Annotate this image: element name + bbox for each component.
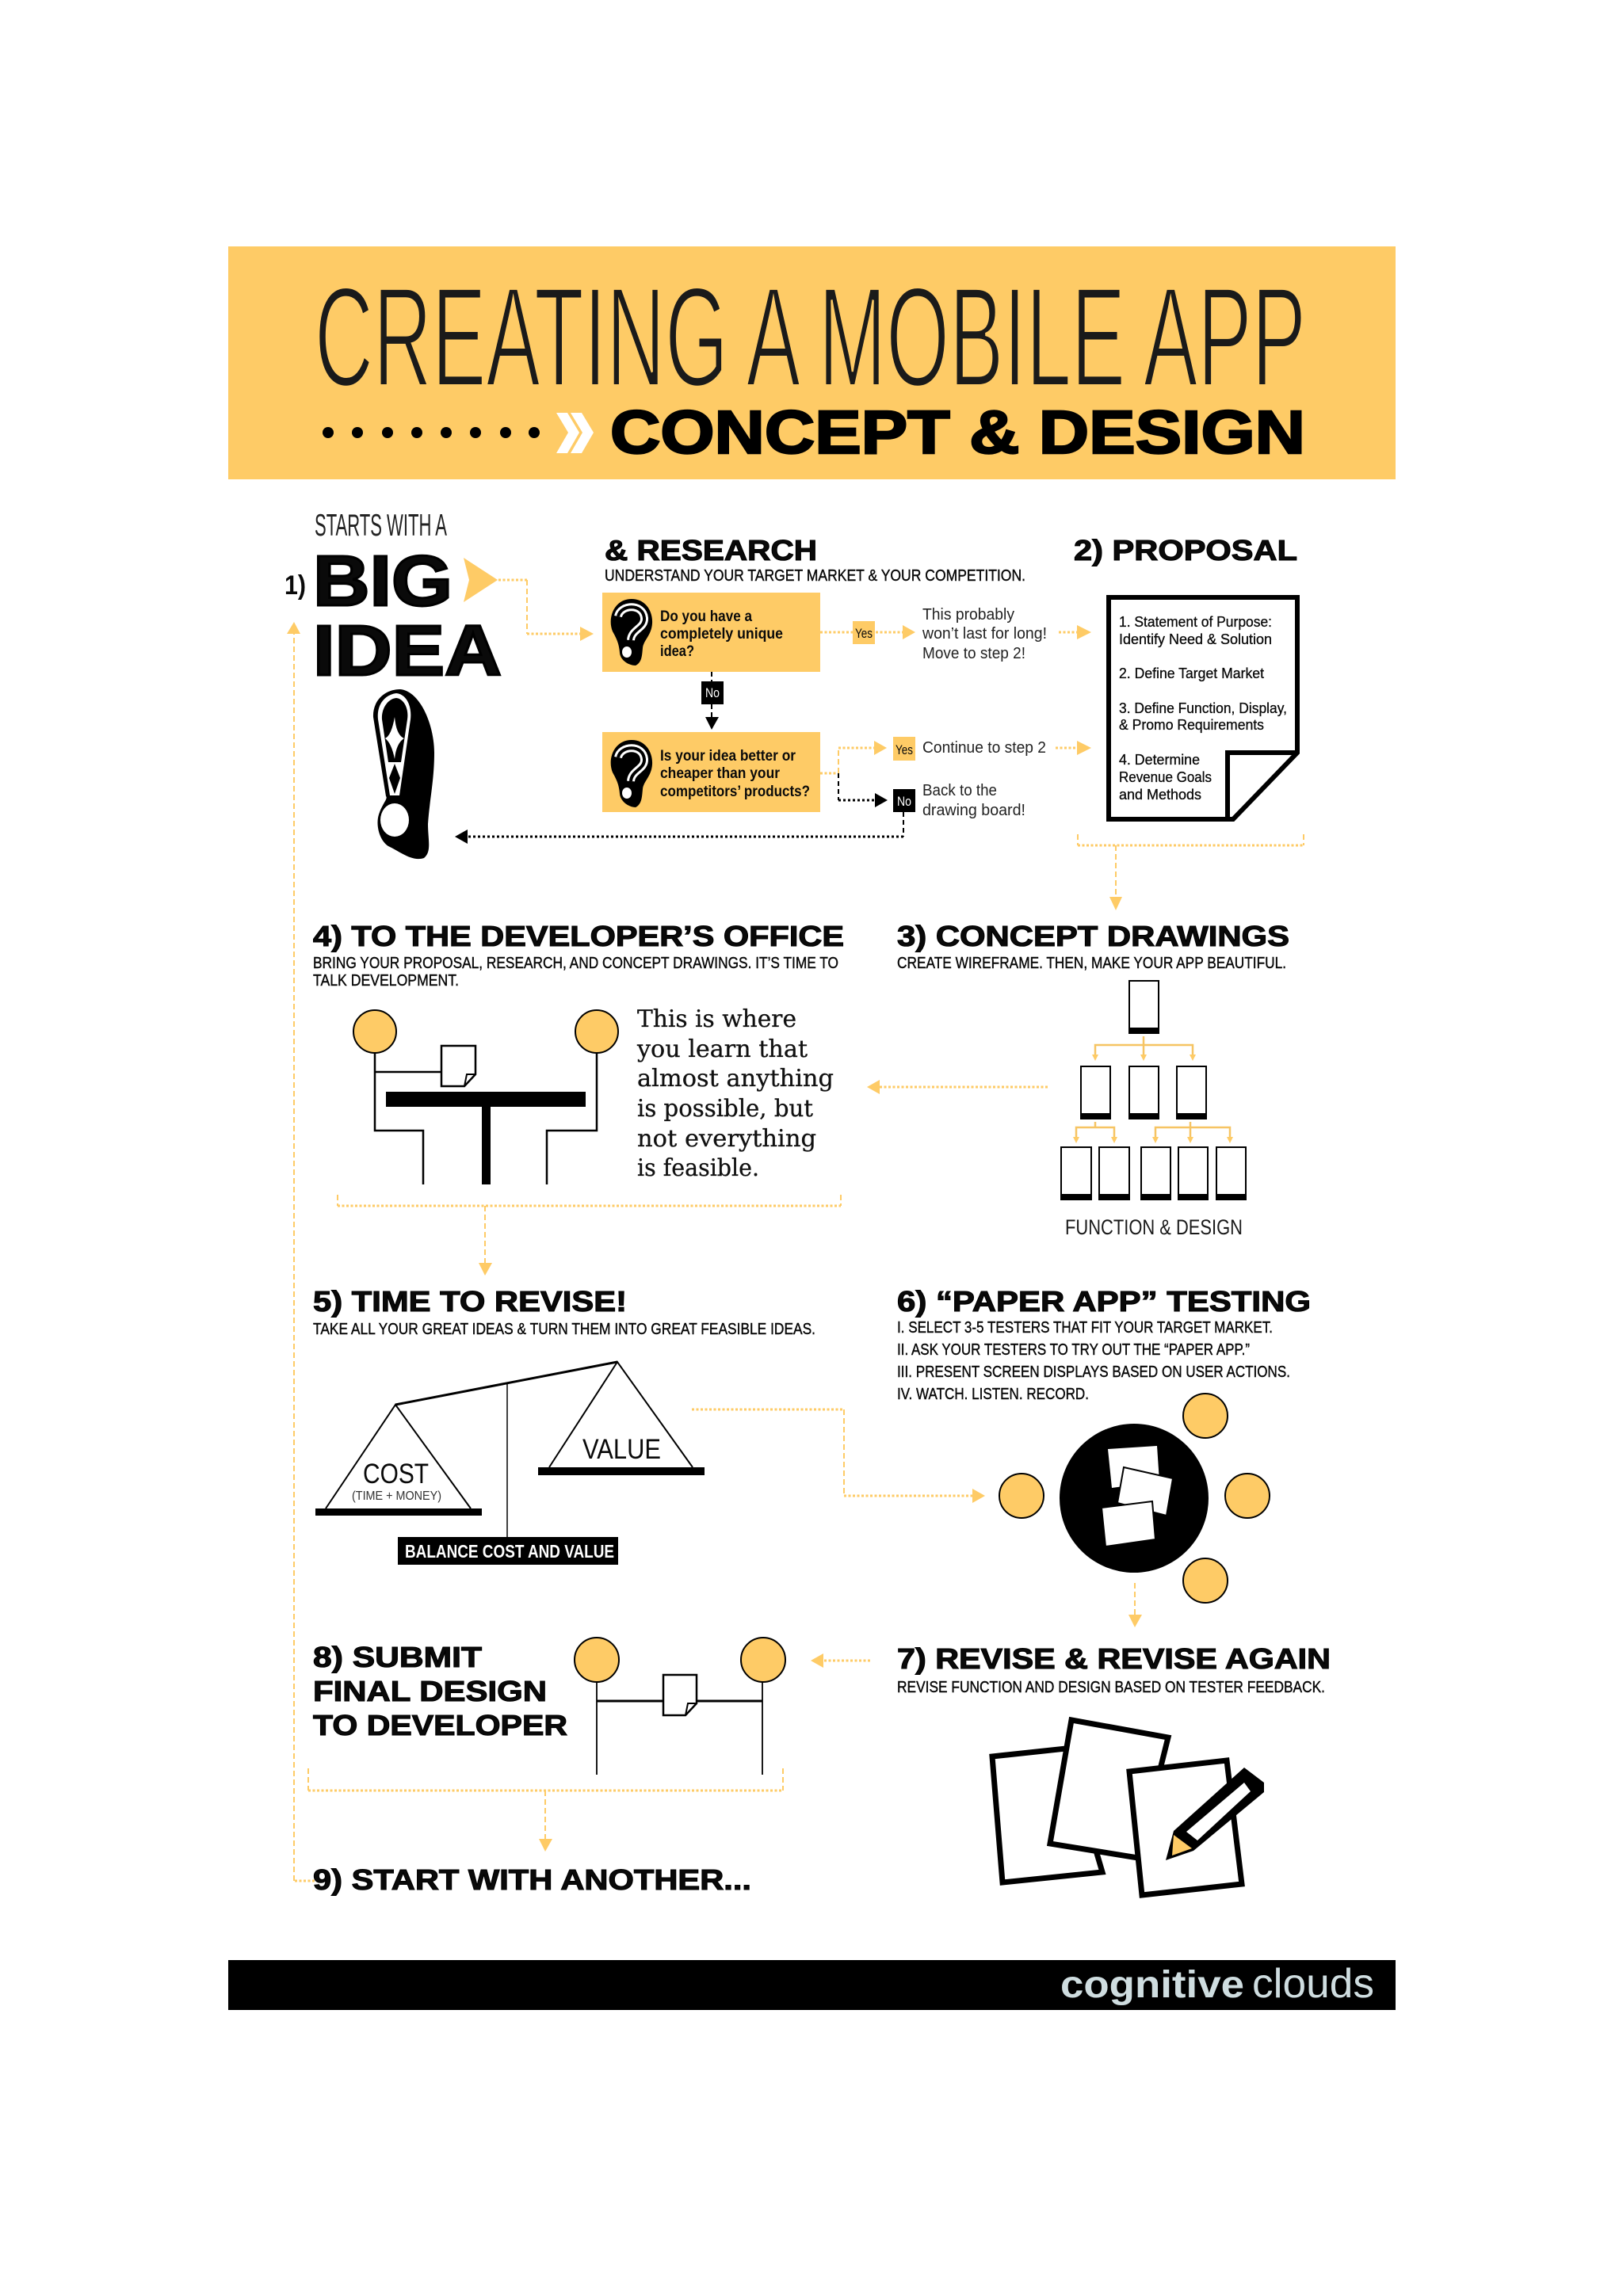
proposal list: 1. Statement of Purpose: bbox=[1119, 613, 1272, 630]
icon: exclamation mark bbox=[373, 689, 434, 859]
testing steps bbox=[897, 1319, 1290, 1403]
developer subtitle: BRING YOUR PROPOSAL, RESEARCH, AND CONCEPT DRAWINGS. IT’S TIME TO bbox=[313, 955, 838, 972]
middle wireframes bbox=[1081, 1066, 1206, 1119]
yes outcome text: Move to step 2! bbox=[922, 645, 1025, 662]
tree arrowheads bbox=[1073, 1055, 1233, 1143]
question text: Do you have a bbox=[660, 608, 752, 625]
developer subtitle bbox=[313, 955, 838, 990]
arrow to proposal 2 bbox=[1056, 741, 1091, 755]
proposal list bbox=[1119, 613, 1287, 803]
step number 1: 1) bbox=[285, 570, 306, 601]
proposal list: & Promo Requirements bbox=[1119, 716, 1264, 733]
icon: white double chevron bbox=[556, 413, 594, 453]
logo: cognitive clouds bbox=[1060, 1961, 1374, 2007]
connector: big idea to research bbox=[498, 580, 594, 641]
heading: revise again: 7) REVISE & REVISE AGAIN bbox=[897, 1642, 1331, 1675]
idea: IDEA bbox=[313, 612, 502, 691]
yes and no split bbox=[820, 741, 888, 807]
loop arrow: back to step 1 bbox=[287, 622, 315, 1881]
arrow to revise again bbox=[1128, 1583, 1142, 1627]
starts with a: STARTS WITH A bbox=[315, 509, 447, 543]
icon: pencil bbox=[1166, 1768, 1264, 1860]
research subtitle: UNDERSTAND YOUR TARGET MARKET & YOUR COMPETITION. bbox=[605, 567, 1025, 585]
big: BIG bbox=[313, 542, 453, 621]
illustration: meeting at a table bbox=[353, 1010, 618, 1184]
value label: VALUE bbox=[582, 1434, 661, 1465]
callout: what is feasible: is feasible. bbox=[637, 1154, 759, 1182]
icon: question mark bbox=[611, 740, 652, 807]
proposal list: 2. Define Target Market bbox=[1119, 665, 1264, 681]
question text bbox=[660, 608, 783, 660]
wireframe home bars bbox=[1060, 1028, 1247, 1200]
no tag 2 bbox=[893, 789, 915, 812]
yes outcome text bbox=[922, 606, 1047, 662]
back to the drawing board text: drawing board! bbox=[922, 802, 1025, 819]
step 8: submit final design bbox=[313, 1638, 785, 1775]
callout: what is feasible: is possible, but bbox=[637, 1095, 813, 1123]
yes tag 2: Yes bbox=[896, 742, 913, 757]
icon: proposal document bbox=[1109, 597, 1297, 819]
question text: idea? bbox=[660, 643, 694, 660]
proposal list: 3. Define Function, Display, bbox=[1119, 700, 1287, 716]
heading: time to revise: 5) TIME TO REVISE! bbox=[313, 1285, 627, 1318]
icon: yellow arrow bbox=[464, 558, 498, 602]
no branch bbox=[701, 672, 724, 730]
footer bar bbox=[228, 1960, 1396, 2010]
heading: developer's office: 4) TO THE DEVELOPER’S OFFICE bbox=[313, 920, 844, 952]
logo: cognitive clouds: clouds bbox=[1252, 1961, 1374, 2007]
tree connectors bbox=[1076, 1036, 1230, 1138]
heading: submit final design: TO DEVELOPER bbox=[313, 1709, 567, 1741]
testing steps: III. PRESENT SCREEN DISPLAYS BASED ON USER ACTIONS. bbox=[897, 1363, 1290, 1381]
heading: paper app testing: 6) “PAPER APP” TESTING bbox=[897, 1285, 1311, 1318]
yes outcome text: This probably bbox=[922, 606, 1014, 624]
research section bbox=[455, 534, 1091, 844]
connector: revise to paper app testing bbox=[692, 1409, 985, 1503]
back to the drawing board text bbox=[922, 782, 1025, 819]
revise again subtitle: REVISE FUNCTION AND DESIGN BASED ON TESTER FEEDBACK. bbox=[897, 1679, 1325, 1696]
illustration: handing over design bbox=[575, 1638, 785, 1775]
illustration: testers around a table bbox=[999, 1394, 1270, 1603]
heading: concept drawings: 3) CONCEPT DRAWINGS bbox=[897, 920, 1289, 952]
logo: cognitive clouds: cognitive bbox=[1060, 1964, 1244, 2006]
wireframe tree bbox=[1060, 981, 1247, 1200]
proposal list: Revenue Goals bbox=[1119, 769, 1212, 785]
step 6: paper app testing bbox=[897, 1285, 1311, 1627]
step 3: concept drawings bbox=[897, 920, 1289, 1239]
heading: submit final design bbox=[313, 1641, 567, 1741]
cost label: COST bbox=[363, 1459, 429, 1489]
step 5: time to revise bbox=[313, 1285, 815, 1565]
subtitle: concept and design: CONCEPT & DESIGN bbox=[610, 399, 1305, 467]
no branch: No bbox=[705, 685, 720, 700]
callout: what is feasible: you learn that bbox=[636, 1035, 808, 1063]
heading: submit final design: FINAL DESIGN bbox=[313, 1675, 547, 1707]
time plus money label: (TIME + MONEY) bbox=[352, 1489, 441, 1503]
heading: proposal: 2) PROPOSAL bbox=[1074, 534, 1297, 566]
question text: Is your idea better or bbox=[660, 748, 796, 765]
heading: research: & RESEARCH bbox=[605, 534, 817, 566]
title banner bbox=[228, 246, 1396, 479]
yes branch 1: Yes bbox=[855, 626, 873, 641]
yes tag 2 bbox=[893, 737, 915, 761]
question box 2 bbox=[602, 732, 820, 812]
proposal list: 4. Determine bbox=[1119, 751, 1200, 768]
step 9: start with another: 9) START WITH ANOTHER... bbox=[313, 1863, 751, 1896]
illustration: papers and pencil bbox=[992, 1720, 1264, 1895]
function and design label: FUNCTION & DESIGN bbox=[1065, 1215, 1243, 1239]
step 1: big idea bbox=[285, 509, 502, 859]
question text: cheaper than your bbox=[660, 765, 781, 782]
callout: what is feasible: not everything bbox=[637, 1125, 816, 1153]
no tag 2: No bbox=[897, 794, 911, 809]
testing steps: I. SELECT 3-5 TESTERS THAT FIT YOUR TARGET MARKET. bbox=[897, 1319, 1273, 1337]
arrow to proposal 1 bbox=[1059, 625, 1091, 639]
back to the drawing board text: Back to the bbox=[922, 782, 997, 799]
step 2: proposal bbox=[1074, 534, 1297, 819]
connector: submit to start another bbox=[308, 1768, 783, 1852]
proposal list: and Methods bbox=[1119, 786, 1201, 803]
concept subtitle: CREATE WIREFRAME. THEN, MAKE YOUR APP BEAUTIFUL. bbox=[897, 955, 1286, 972]
balance label bbox=[398, 1537, 618, 1565]
question text bbox=[660, 748, 810, 800]
heading: submit final design: 8) SUBMIT bbox=[313, 1641, 482, 1673]
testing steps: IV. WATCH. LISTEN. RECORD. bbox=[897, 1386, 1089, 1403]
proposal list: Identify Need & Solution bbox=[1119, 631, 1272, 647]
illustration: balance scale bbox=[315, 1362, 705, 1565]
bottom wireframes bbox=[1061, 1147, 1246, 1199]
question box 1 bbox=[602, 593, 820, 672]
question text: completely unique bbox=[660, 626, 783, 643]
balance label: BALANCE COST AND VALUE bbox=[405, 1541, 614, 1562]
connector: proposal to concept drawings bbox=[1078, 834, 1304, 910]
continue text: Continue to step 2 bbox=[922, 739, 1046, 757]
arrow: concept drawings to developer bbox=[867, 1080, 1048, 1094]
arrow: revise again to submit bbox=[811, 1653, 870, 1668]
top wireframe bbox=[1129, 981, 1159, 1033]
testing steps: II. ASK YOUR TESTERS TO TRY OUT THE “PAPER APP.” bbox=[897, 1341, 1250, 1359]
dotted lead-in bbox=[323, 427, 540, 438]
developer subtitle: TALK DEVELOPMENT. bbox=[313, 972, 459, 990]
callout: what is feasible bbox=[636, 1005, 834, 1182]
yes outcome text: won’t last for long! bbox=[922, 625, 1047, 643]
callout: what is feasible: This is where bbox=[637, 1005, 796, 1033]
step 7: revise and revise again bbox=[897, 1642, 1331, 1895]
question text: competitors’ products? bbox=[660, 784, 810, 800]
callout: what is feasible: almost anything bbox=[637, 1065, 834, 1093]
arrow back to big idea bbox=[455, 812, 903, 844]
revise subtitle: TAKE ALL YOUR GREAT IDEAS & TURN THEM INTO GREAT FEASIBLE IDEAS. bbox=[313, 1321, 815, 1338]
connector: developer's office to revise bbox=[338, 1195, 841, 1276]
step 4: developer's office bbox=[313, 920, 844, 1184]
icon: question mark bbox=[611, 599, 652, 666]
yes branch 1 bbox=[820, 621, 915, 644]
